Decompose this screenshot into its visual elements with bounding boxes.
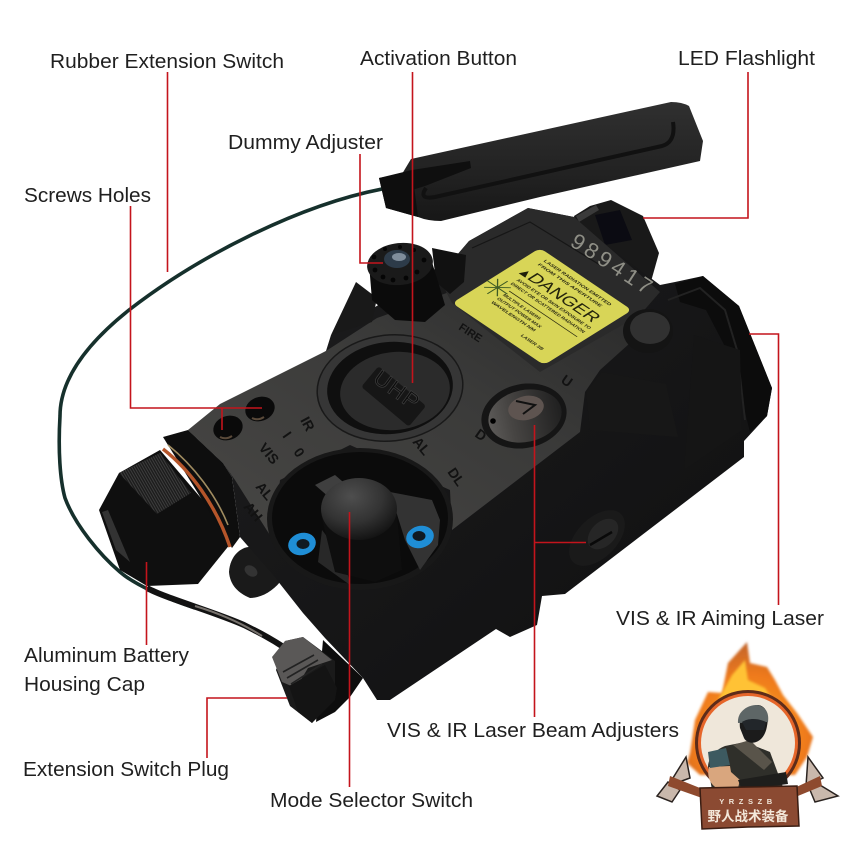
extension switch plug	[272, 637, 363, 723]
serial number: 989417	[566, 228, 657, 299]
battery cap	[99, 430, 240, 586]
engraved markings: AH	[241, 499, 266, 524]
icon: soldier	[708, 705, 788, 790]
label: Activation Button: Activation Button	[360, 47, 517, 70]
activation button: UHP	[369, 365, 424, 414]
side of housing	[188, 208, 772, 700]
danger label	[452, 248, 632, 365]
tab on body	[229, 547, 280, 598]
extension cable	[59, 189, 382, 648]
label: Aluminum Battery Housing Cap: Housing Cap	[24, 673, 145, 696]
engraved markings: U	[558, 371, 576, 390]
icon: left axe	[657, 757, 705, 802]
blue ring left	[286, 530, 318, 558]
upper beam adjuster	[475, 376, 573, 456]
mode selector switch	[267, 448, 453, 590]
screw holes	[210, 393, 278, 444]
leader: battery cap	[146, 562, 148, 645]
top face	[188, 240, 650, 540]
icon: flames	[687, 642, 813, 775]
danger heading: DANGER	[523, 270, 605, 325]
label: Mode Selector Switch: Mode Selector Switch	[270, 789, 473, 812]
flashlight	[574, 200, 659, 298]
laser body	[188, 208, 772, 700]
burst icon	[477, 274, 518, 301]
engraved markings: 0	[291, 445, 308, 460]
blue ring right	[404, 523, 436, 551]
leader: screws holes	[130, 206, 262, 430]
activation button	[312, 328, 468, 448]
danger label: OUTPUT POWER MAX	[496, 297, 544, 329]
label: Aluminum Battery Housing Cap: Aluminum Battery	[24, 644, 190, 667]
leader: rubber extension switch	[166, 72, 168, 272]
leader: mode selector	[348, 512, 350, 787]
lower beam adjuster	[559, 500, 635, 576]
brand badge: 野人战术装备	[708, 808, 789, 824]
danger label: LASER RADIATION EMITTED	[542, 259, 614, 307]
engraved markings: D	[472, 425, 490, 444]
leader: dummy adjuster	[360, 154, 383, 263]
leader: beam adjusters	[534, 425, 586, 717]
engraved markings	[241, 321, 576, 524]
danger label: MULTIPLE LASERS	[502, 293, 542, 320]
rear side chamfer	[586, 372, 678, 437]
banner	[700, 786, 799, 829]
banner text: YRZSZB	[719, 797, 777, 806]
engraved markings: FIRE	[456, 321, 484, 345]
brand badge	[657, 642, 838, 829]
label: VIS & IR Laser Beam Adjusters: VIS & IR Laser Beam Adjusters	[387, 719, 679, 742]
engraved markings: DL	[445, 465, 469, 489]
danger label: AVOID EYE OR SKIN EXPOSURE TO	[515, 278, 593, 330]
leader: extension switch plug	[207, 698, 287, 758]
rear flip cover	[675, 276, 772, 432]
engraved markings: AL	[253, 479, 277, 504]
engraved markings: VIS	[256, 440, 282, 467]
leader: LED flashlight	[643, 72, 748, 218]
label: Extension Switch Plug: Extension Switch Plug	[23, 758, 229, 781]
icon: medallion	[695, 690, 801, 796]
danger label: DIRECT OR SCATTERED RADIATION	[509, 282, 586, 334]
rear button	[623, 309, 673, 353]
label: Screws Holes: Screws Holes	[24, 184, 151, 207]
engraved markings: IR	[297, 414, 318, 434]
dummy adjuster knob	[331, 240, 466, 335]
danger label: WAVELENGTH NM	[490, 300, 537, 332]
leader: VIS and IR aiming laser	[749, 334, 778, 605]
label: VIS & IR Aiming Laser: VIS & IR Aiming Laser	[616, 607, 824, 630]
label: LED Flashlight: LED Flashlight	[678, 47, 815, 70]
engraved markings: AL	[410, 434, 434, 459]
label: Rubber Extension Switch: Rubber Extension Switch	[50, 50, 284, 73]
label: Dummy Adjuster: Dummy Adjuster	[228, 131, 383, 154]
danger label: FROM THIS APERTURE	[536, 263, 604, 308]
engraved markings: I	[280, 429, 295, 441]
rubber extension switch	[379, 102, 703, 221]
leader: activation button	[412, 72, 414, 383]
rear top face	[440, 208, 660, 372]
label: Aluminum Battery Housing Cap	[24, 644, 190, 696]
danger label: LASER 3B	[519, 334, 546, 351]
icon: right axe	[790, 757, 838, 802]
